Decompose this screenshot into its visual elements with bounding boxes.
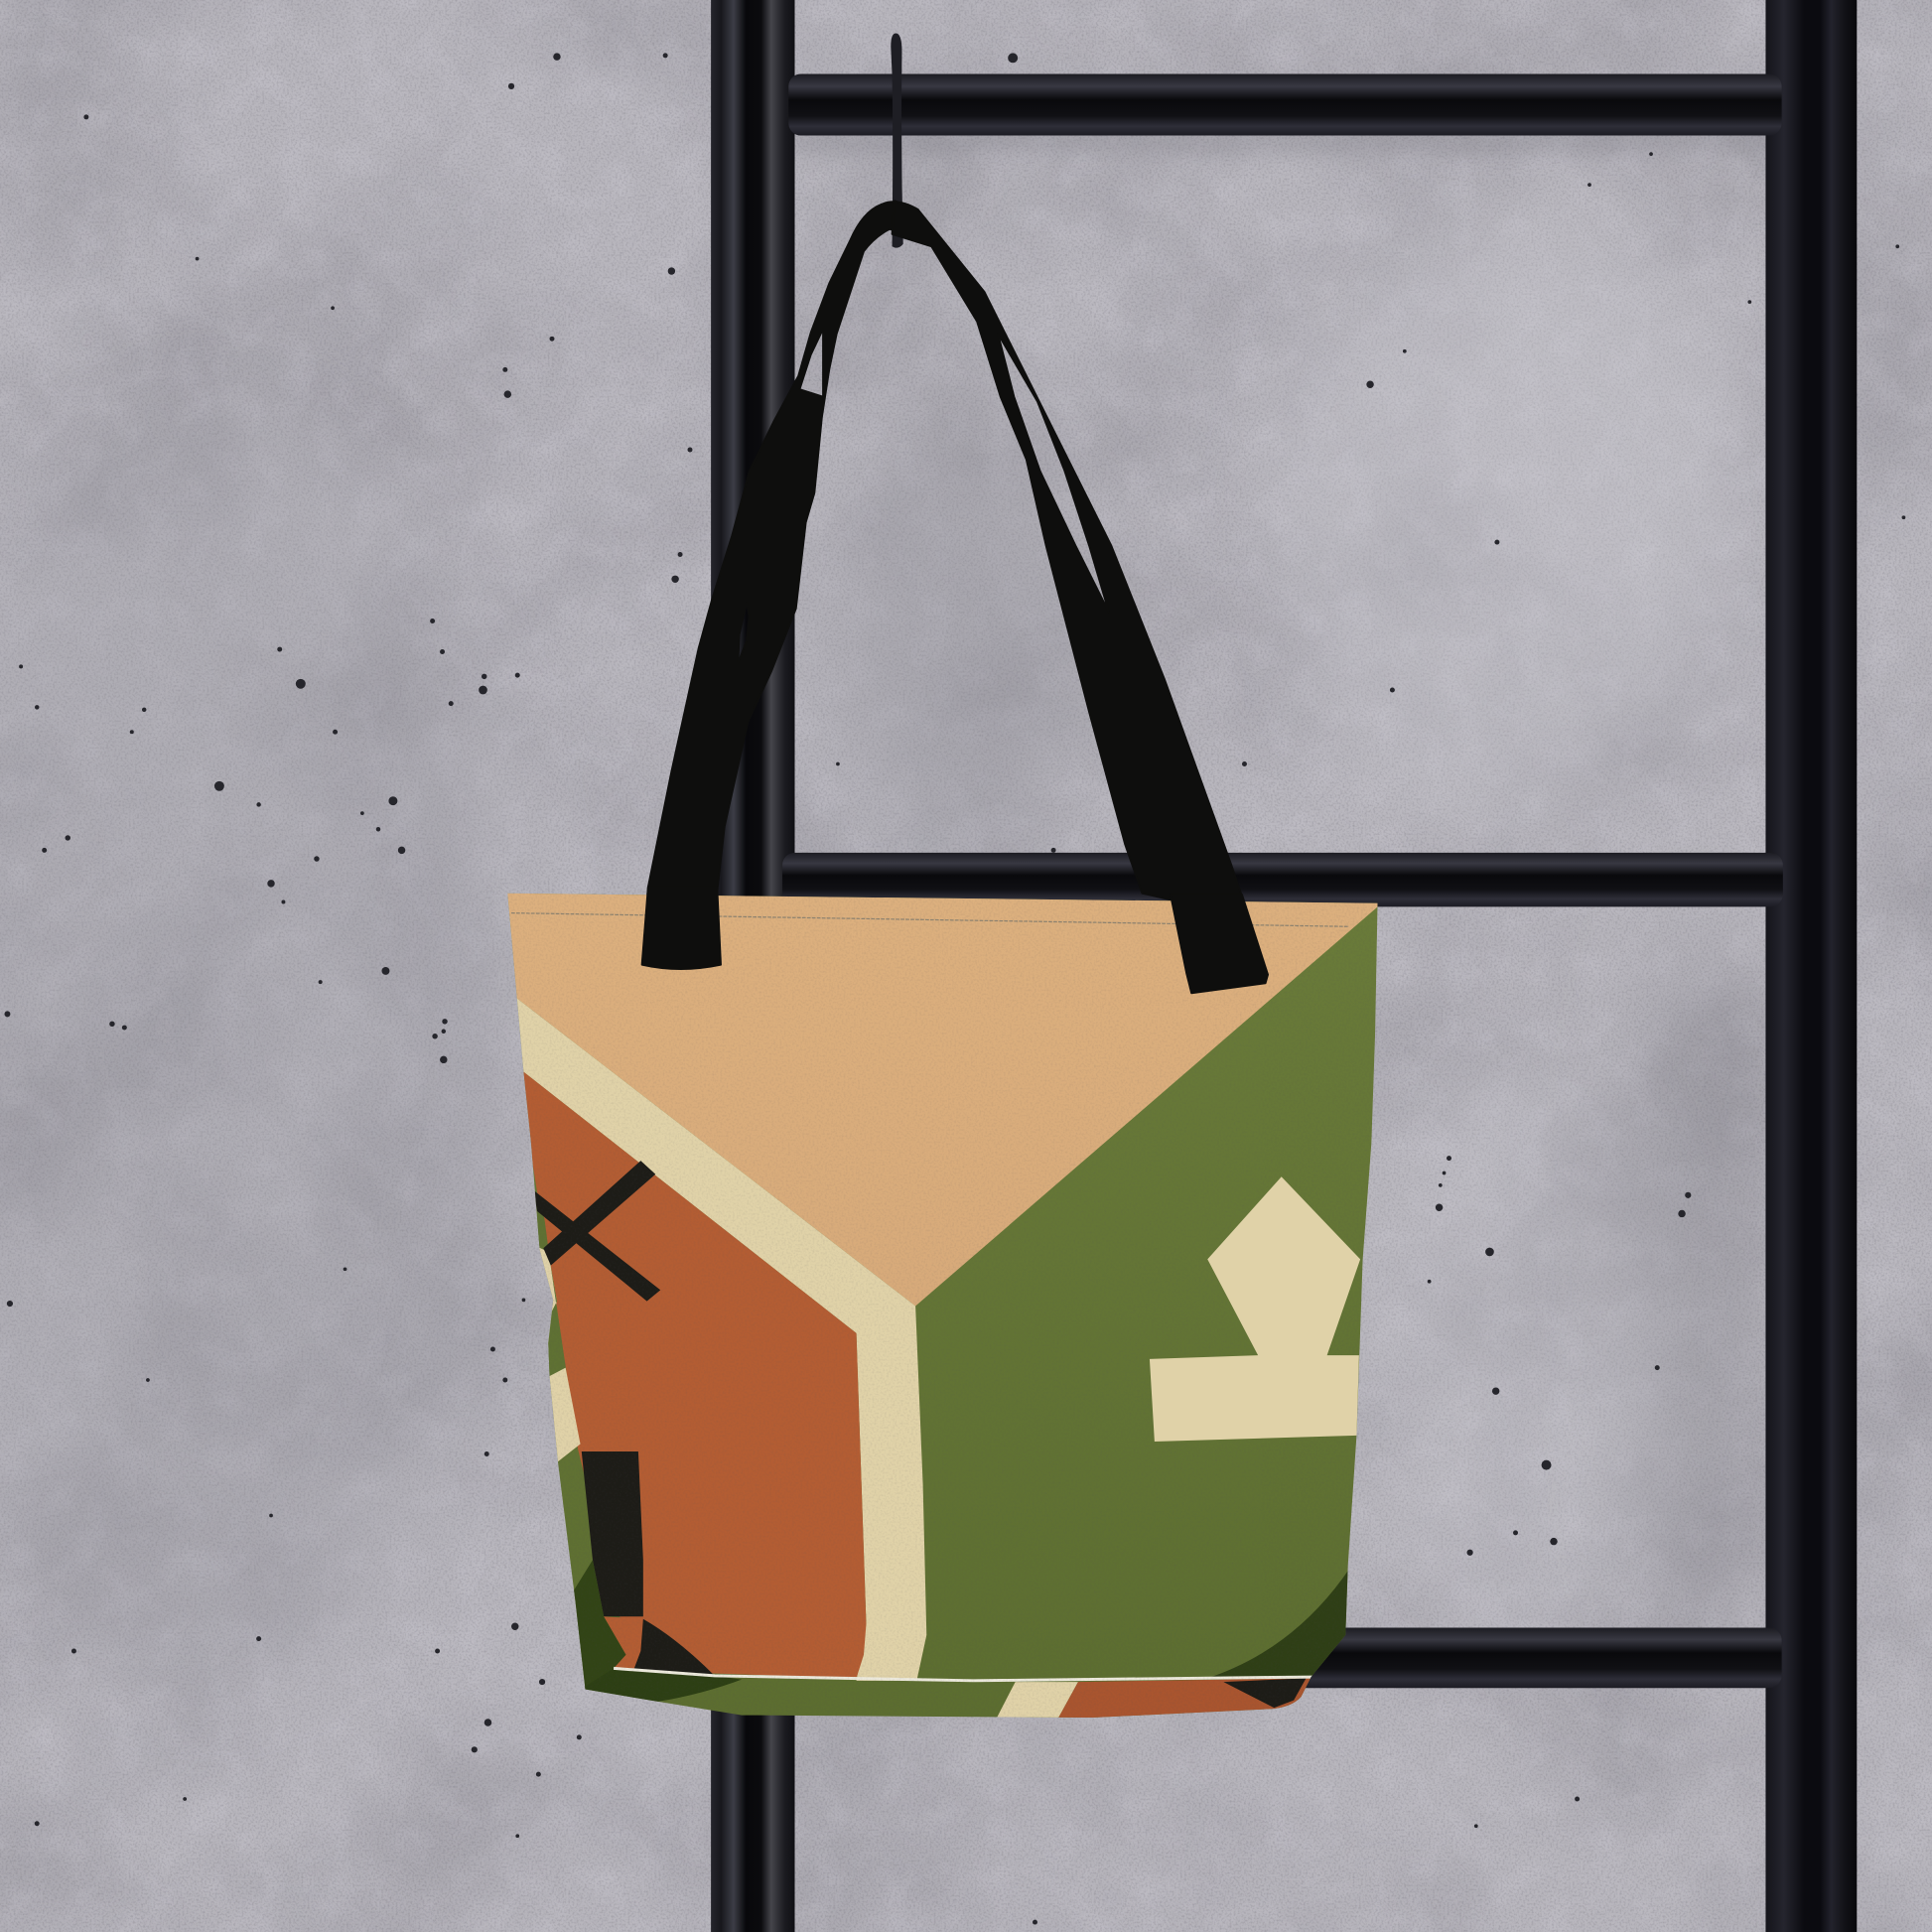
left handle base: [642, 888, 721, 969]
bottom cream stripe: [996, 1682, 1078, 1721]
orange panel: [517, 1067, 866, 1678]
metal hook: [891, 34, 903, 248]
dark green bottom fold left: [579, 1668, 742, 1702]
white bottom seam: [614, 1668, 1313, 1681]
bottom orange stripe: [1057, 1678, 1313, 1721]
black rectangle: [582, 1451, 643, 1616]
dark green corner left: [567, 1560, 625, 1694]
fabric grain: [492, 888, 1392, 1725]
black triangle: [633, 1619, 715, 1676]
peach top panel: [499, 890, 1386, 1307]
black ladder: [711, 0, 1857, 1932]
black X mark: [533, 1161, 660, 1302]
green base: [492, 888, 1392, 1725]
tote bag body: [492, 888, 1392, 1725]
bag handles: [642, 201, 1249, 969]
handle bases over bag: [642, 888, 1268, 993]
ladder left rail: [711, 0, 794, 1932]
right handle base: [1171, 895, 1268, 993]
bottom black corner: [1223, 1678, 1307, 1708]
dark green corner right: [1204, 1568, 1350, 1680]
left green fragment upper: [537, 1192, 566, 1380]
right handle: [893, 201, 1249, 918]
cream Y band: [499, 985, 926, 1681]
ladder top rung: [788, 73, 1782, 136]
left handle: [642, 202, 918, 969]
cream chess-piece motif: [1150, 1176, 1360, 1442]
top stitch line: [511, 913, 1349, 926]
left cream fragment lower: [550, 1368, 580, 1461]
left cream fragment upper: [540, 1247, 557, 1342]
ladder middle rung: [782, 853, 1783, 906]
small orange patch: [604, 1616, 643, 1668]
ladder bottom rung: [1294, 1627, 1782, 1688]
ladder right rail: [1765, 0, 1857, 1932]
